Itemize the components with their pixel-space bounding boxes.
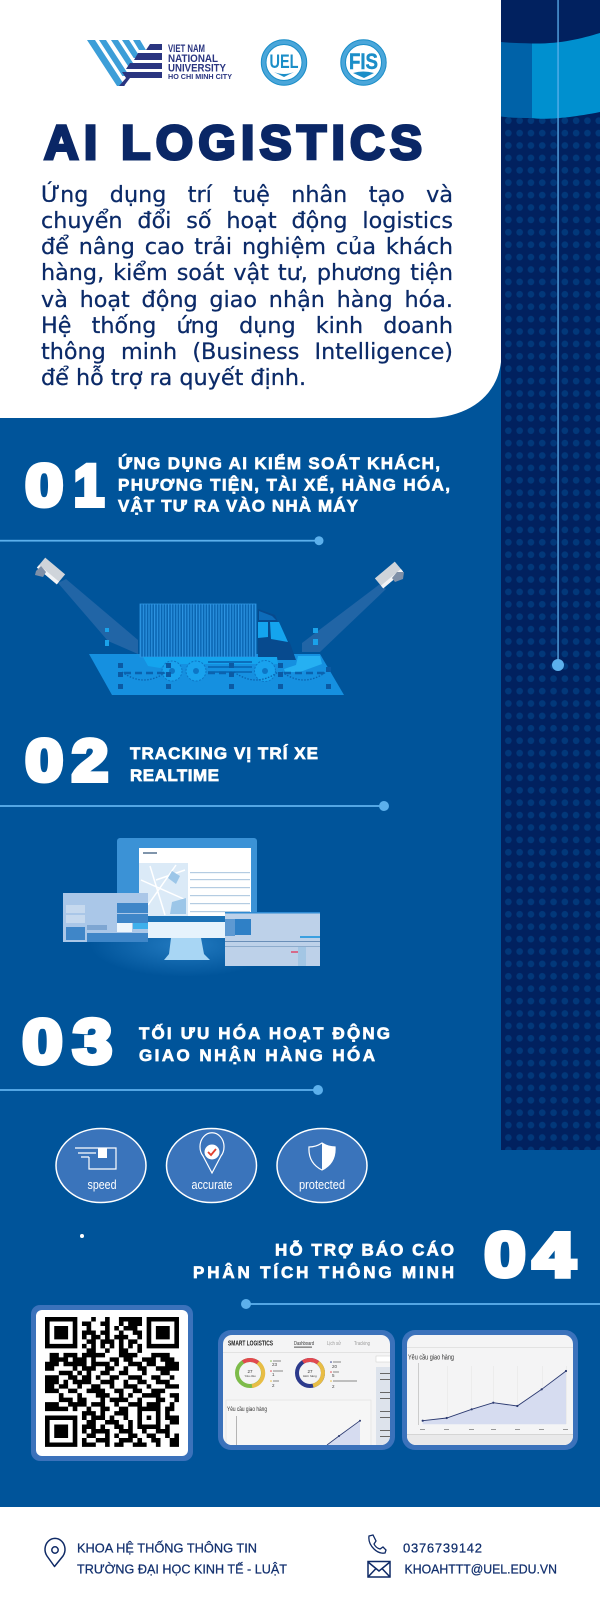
logo: UEL: UEL bbox=[270, 52, 299, 73]
panel: dashboard screenshot: 1 bbox=[272, 1372, 275, 1377]
icon: envelope bbox=[368, 1562, 390, 1577]
section 01 heading: VẬT TƯ RA VÀO NHÀ MÁY bbox=[118, 496, 359, 516]
camera right bbox=[375, 562, 404, 588]
divider 02 bbox=[0, 801, 389, 811]
truck cab bbox=[258, 609, 296, 660]
intro text block: Ứng dụng trí tuệ nhân tạo và bbox=[41, 182, 453, 208]
panel: dashboard screenshot: 20 bbox=[332, 1364, 338, 1369]
intro text block: hàng, kiểm soát vật tư, phương tiện bbox=[41, 260, 453, 286]
contact: email: KHOAHTTT@UEL.EDU.VN bbox=[404, 1562, 557, 1576]
section 03 heading: 0 bbox=[22, 1008, 62, 1077]
panel: dashboard screenshot: Yêu cầu giao hàng bbox=[227, 1404, 267, 1413]
contact: address: TRƯỜNG ĐẠI HỌC KINH TẾ - LUẬT bbox=[77, 1562, 287, 1576]
divider 04 bbox=[241, 1299, 600, 1309]
panel: dashboard screenshot: Dashboard bbox=[294, 1341, 314, 1347]
section 01 heading: ỨNG DỤNG AI KIỂM SOÁT KHÁCH, bbox=[118, 454, 440, 473]
panel: dashboard screenshot: 27 bbox=[307, 1369, 313, 1374]
panel: dashboard screenshot: Đơn hàng bbox=[303, 1374, 317, 1378]
badge: protected: protected bbox=[299, 1177, 345, 1192]
panel: footer bbox=[0, 1507, 600, 1600]
icon: location pin bbox=[45, 1538, 65, 1566]
section 02 heading: 0 bbox=[26, 728, 63, 794]
panel: dashboard screenshot bbox=[218, 1330, 396, 1450]
section 01 heading: PHƯƠNG TIỆN, TÀI XẾ, HÀNG HÓA, bbox=[118, 476, 450, 494]
panel: dashboard screenshot: 23 bbox=[272, 1362, 278, 1367]
intro text block: chuyển đổi số hoạt động logistics bbox=[41, 208, 453, 234]
intro text block bbox=[41, 181, 453, 391]
section 02 heading: 2 bbox=[72, 728, 108, 794]
section 02 heading: REALTIME bbox=[130, 766, 219, 785]
section 04 heading: 0 bbox=[484, 1221, 526, 1290]
QR code bbox=[31, 1305, 193, 1461]
logo: FIS bbox=[341, 40, 386, 85]
panel: delivery request chart: Yêu cầu giao hàng bbox=[408, 1352, 454, 1362]
section 04 heading: HỖ TRỢ BÁO CÁO bbox=[275, 1240, 454, 1260]
panel: dashboard screenshot: 5 bbox=[332, 1373, 335, 1378]
section 01 heading: 0 bbox=[26, 454, 63, 518]
title: AI LOGISTICS bbox=[44, 117, 422, 170]
badge: accurate bbox=[166, 1128, 256, 1202]
contact: address: KHOA HỆ THỐNG THÔNG TIN bbox=[77, 1540, 257, 1556]
light beam right bbox=[302, 584, 386, 652]
section 01 heading: 1 bbox=[74, 454, 104, 518]
logo: UEL bbox=[261, 40, 307, 85]
intro text block: thông minh (Business Intelligence) bbox=[41, 339, 453, 365]
logo: Viet Nam National University bbox=[87, 40, 232, 86]
chassis bbox=[143, 657, 278, 668]
monitor stand bbox=[164, 938, 210, 960]
monitor body bbox=[117, 838, 257, 938]
container bbox=[140, 604, 256, 657]
section 04 heading: PHÂN TÍCH THÔNG MINH bbox=[193, 1263, 454, 1282]
section 03 heading: 3 bbox=[73, 1008, 112, 1077]
bollards bbox=[105, 628, 318, 646]
panel: dashboard screenshot: Tracking bbox=[354, 1341, 370, 1347]
section 04 heading bbox=[193, 1221, 576, 1290]
divider 01 bbox=[0, 536, 324, 545]
panel: dashboard screenshot: 2 bbox=[272, 1383, 275, 1388]
illustration: dashboard monitor bbox=[63, 838, 320, 977]
section 02 heading bbox=[26, 728, 318, 794]
right screen panel bbox=[225, 912, 320, 966]
intro text block: Hệ thống ứng dụng kinh doanh bbox=[41, 313, 453, 339]
panel: delivery request chart bbox=[402, 1330, 578, 1450]
logo: Viet Nam National University: VIET NAM bbox=[168, 43, 205, 55]
badge: speed: speed bbox=[88, 1177, 116, 1192]
platform bbox=[89, 654, 344, 695]
logo: Viet Nam National University: NATIONAL bbox=[168, 53, 218, 65]
donut chart 2 bbox=[297, 1360, 323, 1386]
donut chart 1 bbox=[237, 1360, 263, 1386]
panel: right decorative strip bbox=[501, 0, 600, 1150]
intro text block: và hoạt động giao nhận hàng hóa. bbox=[41, 287, 453, 313]
light beam left bbox=[58, 579, 138, 654]
intro text block: để nâng cao trải nghiệm của khách bbox=[41, 234, 453, 260]
panel: dashboard screenshot: 2 bbox=[332, 1384, 335, 1389]
logo: Viet Nam National University: HO CHI MINH CITY bbox=[168, 72, 232, 81]
panel: dashboard screenshot: SMART LOGISTICS bbox=[228, 1340, 273, 1348]
panel: white header bbox=[0, 0, 501, 418]
left screen panel bbox=[63, 893, 148, 942]
section 02 heading: TRACKING VỊ TRÍ XE bbox=[130, 744, 318, 763]
logo: FIS: FIS bbox=[349, 49, 378, 74]
badge: speed bbox=[56, 1128, 146, 1202]
section 04 heading: 4 bbox=[533, 1221, 576, 1290]
chain barriers bbox=[122, 672, 326, 680]
camera left bbox=[35, 558, 65, 584]
section 03 heading bbox=[22, 1008, 390, 1077]
divider 03 bbox=[0, 1085, 323, 1095]
barrier posts bbox=[118, 663, 331, 689]
badge: accurate: accurate bbox=[192, 1177, 232, 1192]
contact: address bbox=[77, 1540, 287, 1576]
illustration: truck at checkpoint bbox=[35, 558, 404, 695]
section 03 heading: TỐI ƯU HÓA HOẠT ĐỘNG bbox=[139, 1023, 390, 1043]
intro text block: để hỗ trợ ra quyết định. bbox=[41, 365, 306, 391]
wheels bbox=[162, 660, 276, 682]
icon: phone bbox=[369, 1535, 386, 1553]
contact: phone number: 0376739142 bbox=[403, 1540, 482, 1556]
section 01 heading bbox=[26, 454, 450, 518]
section 03 heading: GIAO NHẬN HÀNG HÓA bbox=[139, 1046, 375, 1065]
panel: dashboard screenshot: Lịch sử bbox=[327, 1340, 341, 1347]
badge: protected bbox=[277, 1128, 367, 1202]
panel: dashboard screenshot: 27 bbox=[247, 1369, 253, 1374]
panel: dashboard screenshot: Yêu cầu bbox=[244, 1374, 256, 1378]
logo: Viet Nam National University: UNIVERSITY bbox=[168, 62, 227, 74]
